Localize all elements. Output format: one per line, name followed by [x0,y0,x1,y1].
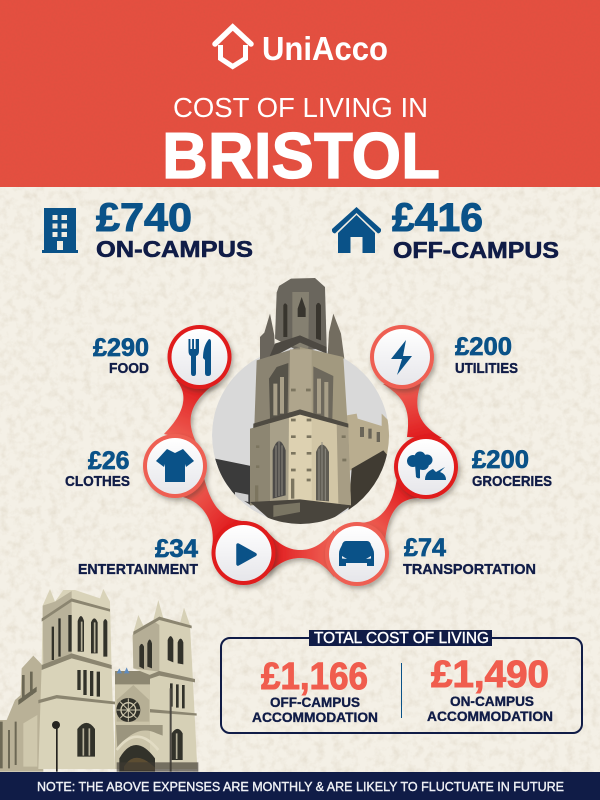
illustration: Bristol Cathedral [0,589,198,772]
footer note [0,772,600,800]
title: BRISTOL [162,119,440,192]
off-campus total: ACCOMMODATION [252,710,378,725]
transportation label: TRANSPORTATION [403,562,536,578]
utilities amount: £200 [455,333,512,361]
base [250,499,352,524]
icon: car [339,541,374,566]
icon: play [238,545,255,564]
icon: lightning bolt [391,340,412,375]
logo wordmark: UniAcco [262,30,388,67]
food item [93,325,232,389]
entertainment label: ENTERTAINMENT [78,562,198,578]
upper stage [275,278,327,352]
utilities label: UTILITIES [455,361,518,377]
middle stage [254,347,300,426]
right tower [133,600,197,769]
off-campus label: OFF-CAMPUS [393,237,559,263]
food label: FOOD [109,361,149,377]
clothes item [65,434,207,498]
icon: shirt [156,449,194,482]
footer note: NOTE: THE ABOVE EXPENSES ARE MONTHLY & ARE LIKELY TO FLUCTUATE IN FUTURE [37,779,564,794]
off-campus summary [332,196,559,263]
photo: Wills Memorial tower in circle [212,278,390,524]
icon: broccoli and bowl [407,452,446,480]
center gable [115,675,150,769]
food node [168,325,232,389]
lower stage [250,418,289,506]
entertainment item [78,521,276,585]
utilities node [370,325,434,389]
windows and openings [52,615,185,772]
groceries label: GROCERIES [472,474,552,490]
food amount: £290 [93,334,149,362]
red header band [0,0,600,187]
transportation node [325,522,389,586]
on-campus total [427,654,553,724]
on-campus total: ON-CAMPUS [450,694,534,709]
panel: total cost of living [221,630,582,733]
utilities item [370,325,518,389]
nave [0,656,43,772]
groceries item [394,435,552,499]
title: COST OF LIVING IN [173,92,428,123]
icon: logo house [215,27,251,66]
arched windows [273,441,286,499]
off-campus total: OFF-CAMPUS [270,695,360,710]
groceries amount: £200 [472,446,529,474]
off-campus total: £1,166 [261,656,368,698]
left tower [38,589,115,769]
on-campus total: £1,490 [431,654,549,696]
clothes label: CLOTHES [65,474,130,490]
on-campus label: ON-CAMPUS [96,236,253,262]
transportation item [325,522,536,586]
spires [260,314,275,362]
on-campus summary [42,196,253,262]
clothes amount: £26 [88,447,130,475]
panel heading: TOTAL COST OF LIVING [314,630,489,647]
groceries node [394,435,458,499]
off-campus amount: £416 [392,196,483,240]
entertainment amount: £34 [155,535,198,563]
panel border [221,638,582,733]
icon: building [42,208,78,253]
connector ring [164,380,442,577]
on-campus amount: £740 [96,196,192,240]
clothes node [143,434,207,498]
icon: fork and knife [188,339,211,376]
on-campus total: ACCOMMODATION [427,709,553,724]
paper background [0,187,600,772]
logo: UniAcco [215,27,388,67]
off-campus total [252,656,378,725]
transportation amount: £74 [404,534,446,562]
entertainment node [212,521,276,585]
icon: house [332,207,381,253]
